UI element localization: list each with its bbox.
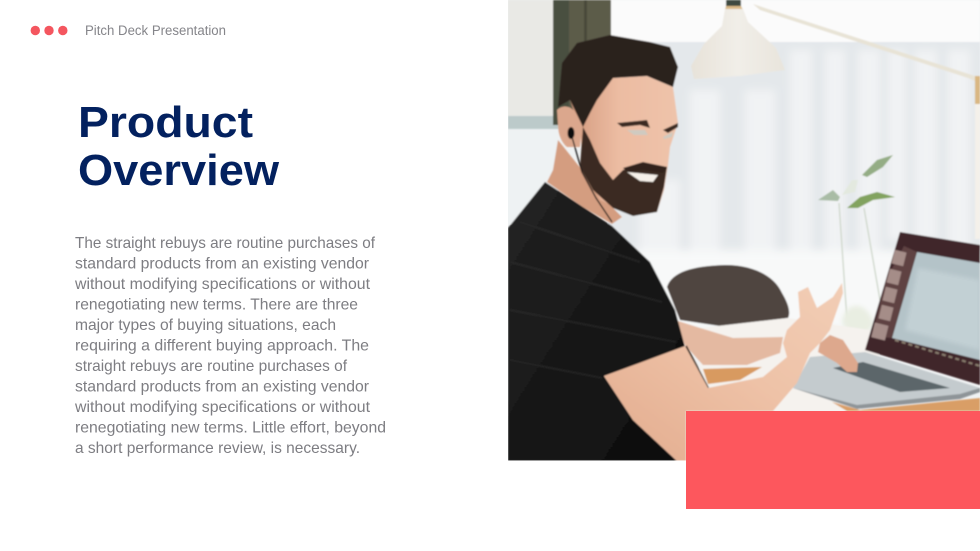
header label: Pitch Deck Presentation xyxy=(85,23,226,38)
photo: man at laptop xyxy=(508,0,980,461)
body paragraph: requiring a different buying approach. The xyxy=(75,338,369,354)
body paragraph xyxy=(74,235,386,457)
beard xyxy=(580,127,667,216)
title: Overview xyxy=(78,146,280,195)
table xyxy=(700,318,980,411)
front arm and gesturing hand xyxy=(604,283,843,461)
body paragraph: standard products from an existing vendor xyxy=(75,378,370,396)
earphone and cable xyxy=(568,127,612,222)
smile xyxy=(623,162,667,182)
floor lamp xyxy=(691,0,980,239)
man torso: black t-shirt xyxy=(508,182,708,461)
body paragraph: standard products from an existing vendor xyxy=(75,256,370,272)
neck xyxy=(547,140,622,224)
body paragraph: without modifying specifications or without xyxy=(74,276,371,293)
body paragraph: without modifying specifications or without xyxy=(74,399,371,416)
body paragraph: renegotiating new terms. There are three xyxy=(75,296,358,314)
coral rectangle xyxy=(686,411,980,509)
header dots xyxy=(31,26,68,35)
body paragraph: a short performance review, is necessary. xyxy=(75,440,360,457)
body paragraph: straight rebuys are routine purchases of xyxy=(75,358,348,375)
hair xyxy=(558,35,678,127)
face xyxy=(570,76,678,215)
laptop xyxy=(793,232,980,409)
photo background: window and blinds xyxy=(508,0,980,330)
title: Product xyxy=(78,98,253,147)
body paragraph: The straight rebuys are routine purchases of xyxy=(75,235,376,252)
ear xyxy=(557,106,582,147)
eyes and brows xyxy=(617,120,678,139)
back arm xyxy=(675,320,783,365)
title xyxy=(78,98,280,195)
chair xyxy=(667,265,789,326)
body paragraph: renegotiating new terms. Little effort, beyond xyxy=(75,420,386,436)
plant xyxy=(818,155,895,334)
hand on keyboard xyxy=(818,335,858,372)
body paragraph: major types of buying situations, each xyxy=(75,317,336,334)
